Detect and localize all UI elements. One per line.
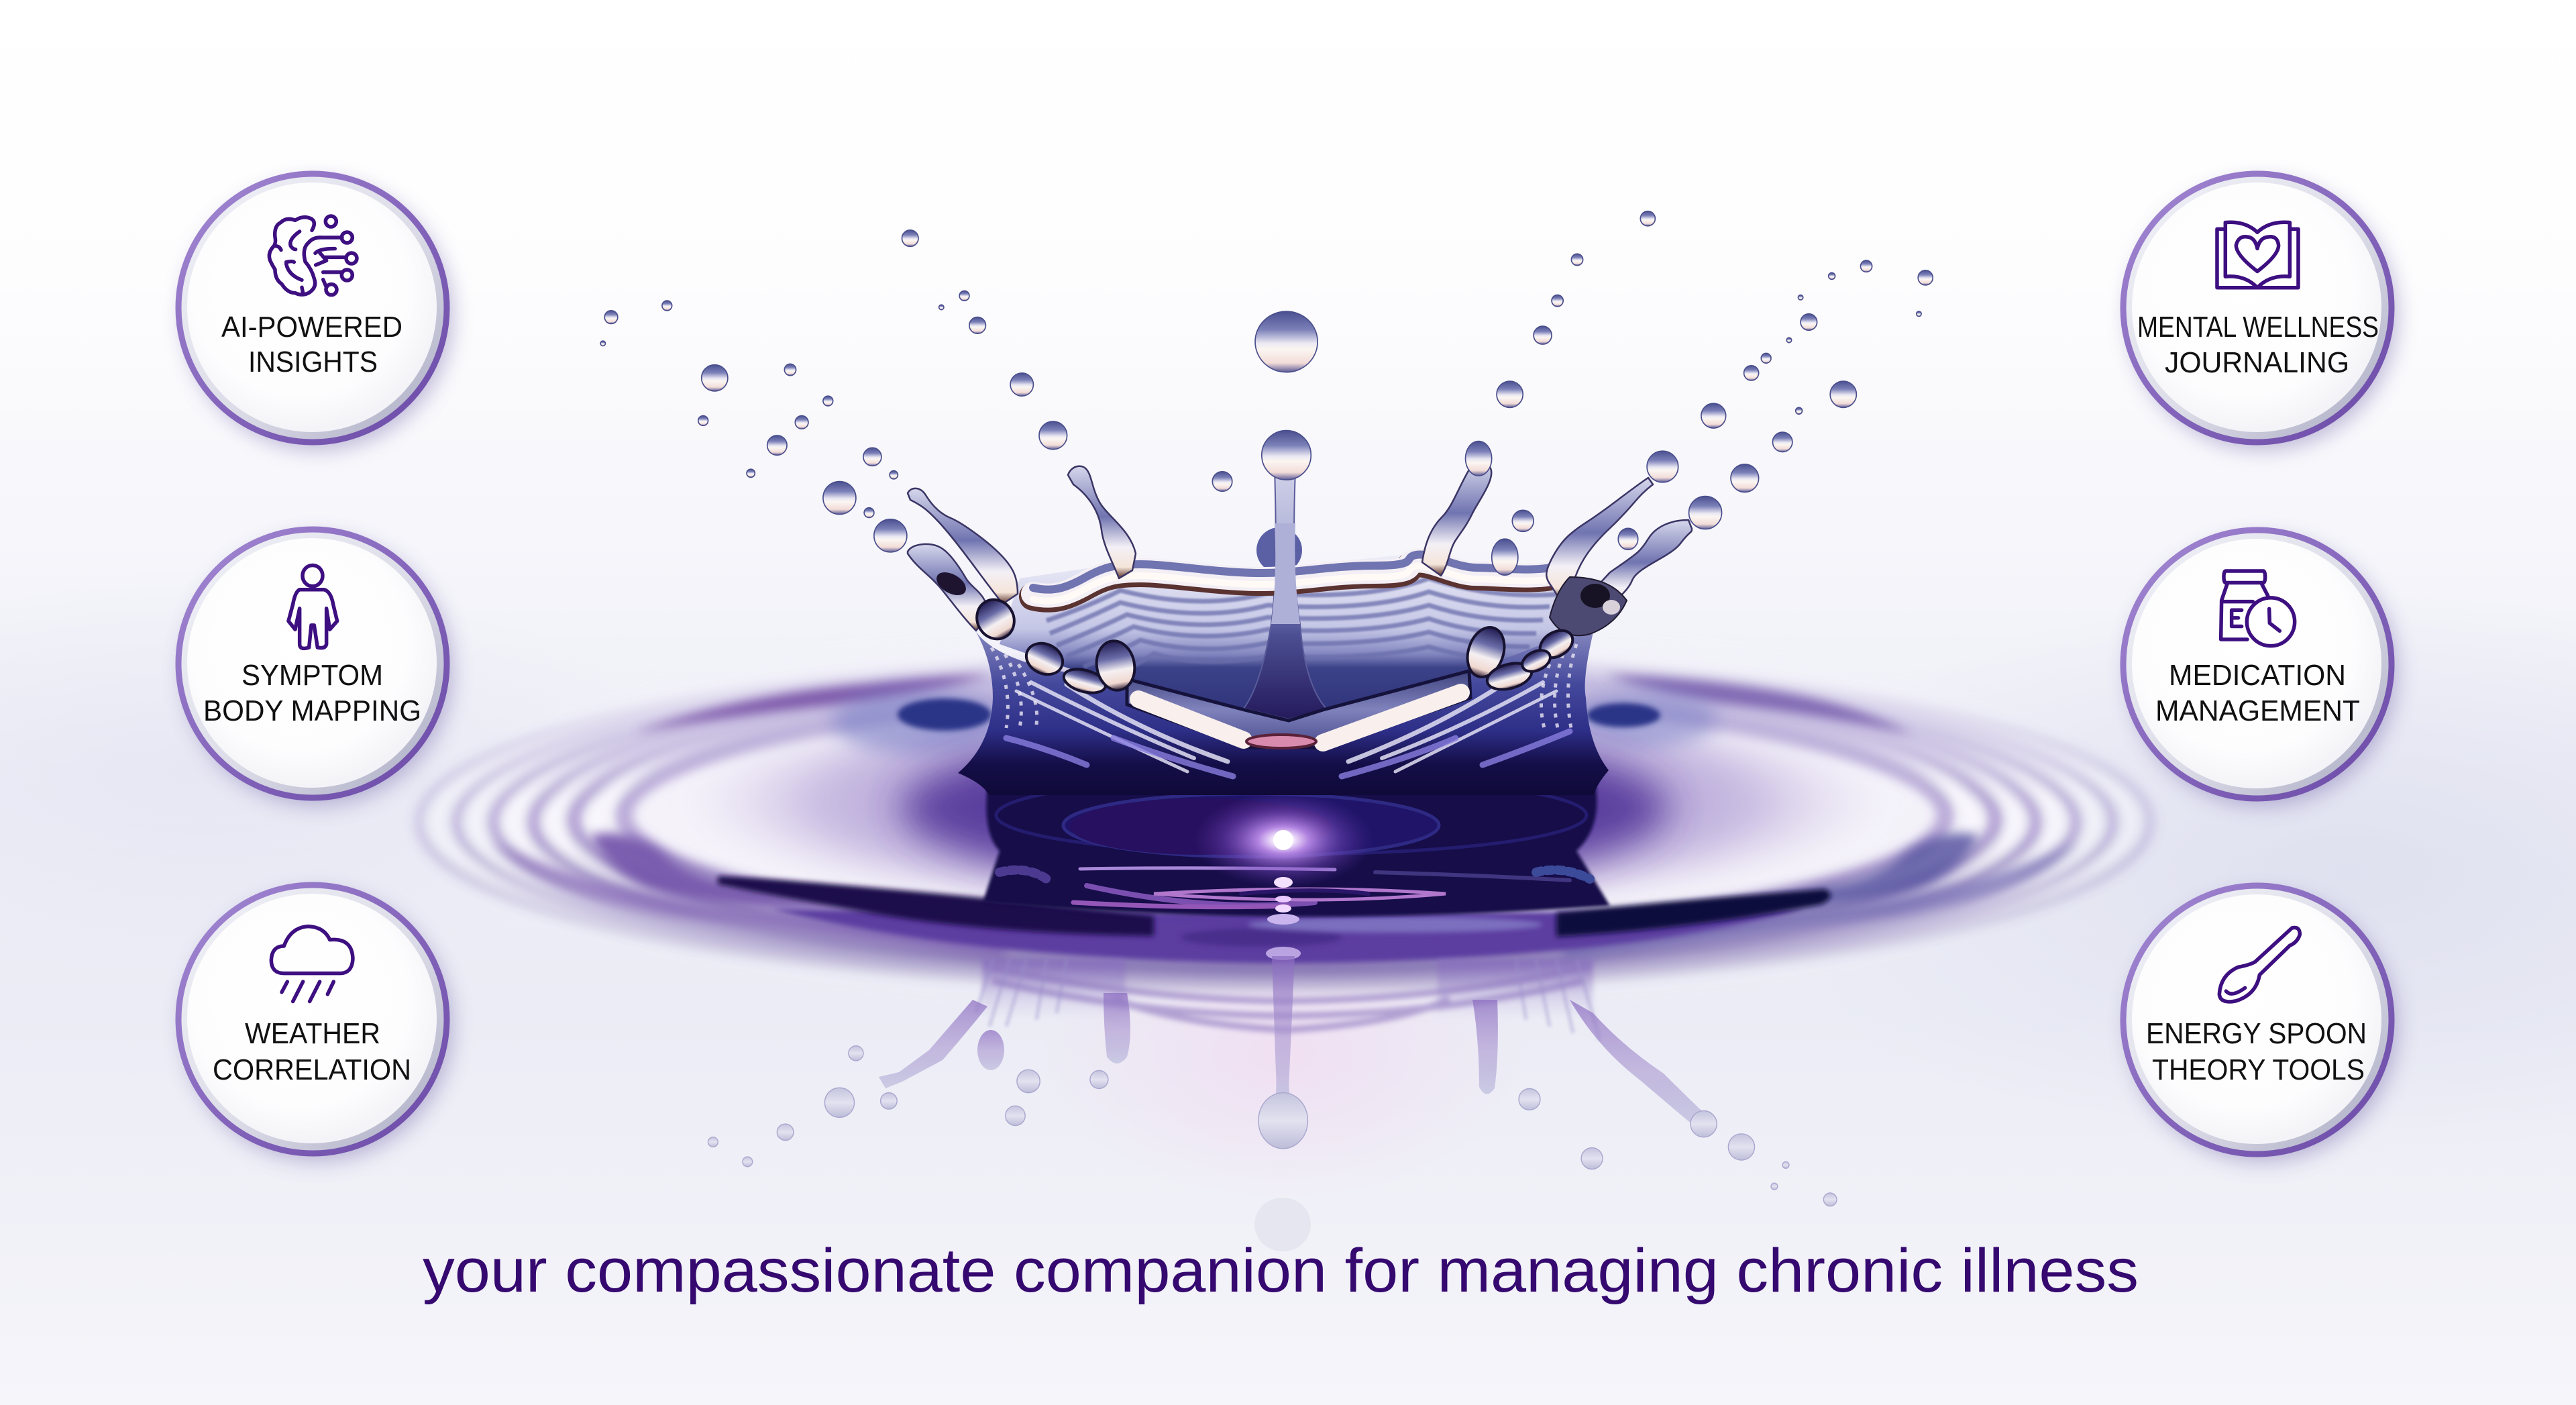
label: THEORY TOOLS <box>2152 1053 2365 1086</box>
speckled sides <box>991 644 1576 728</box>
lavender water disc <box>681 681 1888 923</box>
icon: brain circuit <box>269 216 357 295</box>
feature badge: weather correlation <box>178 885 452 1161</box>
light spot and its reflections <box>1193 792 1374 960</box>
feature badge: energy spoon theory tools <box>2123 886 2397 1161</box>
column over rim <box>1271 523 1300 624</box>
rim beads <box>970 593 1578 697</box>
back wall <box>1000 554 1576 721</box>
back rim <box>1033 555 1556 601</box>
reflection of the splash <box>879 956 1711 1251</box>
label: JOURNALING <box>2165 346 2349 379</box>
label: MANAGEMENT <box>2155 694 2360 727</box>
airborne droplets <box>600 211 1933 575</box>
feature badge: AI-powered insights <box>178 174 452 450</box>
label: SYMPTOM <box>241 659 383 692</box>
label: AI-POWERED <box>221 311 402 344</box>
wall streaks <box>1016 682 1556 772</box>
icon: journal with heart <box>2217 222 2298 288</box>
feature badge: mental wellness journaling <box>2123 174 2397 450</box>
label: WEATHER <box>245 1017 380 1050</box>
reflected droplets <box>708 1046 1837 1206</box>
tagline: your compassionate companion for managing chronic illness <box>423 1237 2139 1305</box>
right spikes <box>1422 462 1491 576</box>
central column <box>1244 470 1326 719</box>
label: ENERGY SPOON <box>2146 1017 2367 1050</box>
ripple rings on the water surface <box>419 658 2150 986</box>
purple crescents in the ripples <box>491 675 2078 959</box>
front rim band <box>1127 671 1470 747</box>
feature badge: symptom body mapping <box>178 529 452 805</box>
left spikes <box>908 544 989 631</box>
front wall <box>958 624 1609 795</box>
icon: rain cloud <box>271 927 353 1001</box>
wavy stripes <box>1046 578 1556 676</box>
pale water sheet <box>486 647 2083 983</box>
label: INSIGHTS <box>248 346 378 378</box>
dark crest under the crown <box>718 876 1831 964</box>
crown base and dark pool <box>902 731 1667 917</box>
label: CORRELATION <box>213 1053 411 1086</box>
behind-column drop <box>1256 527 1302 573</box>
label: BODY MAPPING <box>203 694 421 727</box>
splash crown <box>908 462 1692 795</box>
label: MEDICATION <box>2169 659 2346 692</box>
icon: pill bottle and clock <box>2221 571 2295 646</box>
label: MENTAL WELLNESS <box>2137 311 2379 344</box>
icon: spoon <box>2219 927 2300 1002</box>
feature badge: medication management <box>2123 530 2397 806</box>
icon: body figure <box>288 565 337 648</box>
